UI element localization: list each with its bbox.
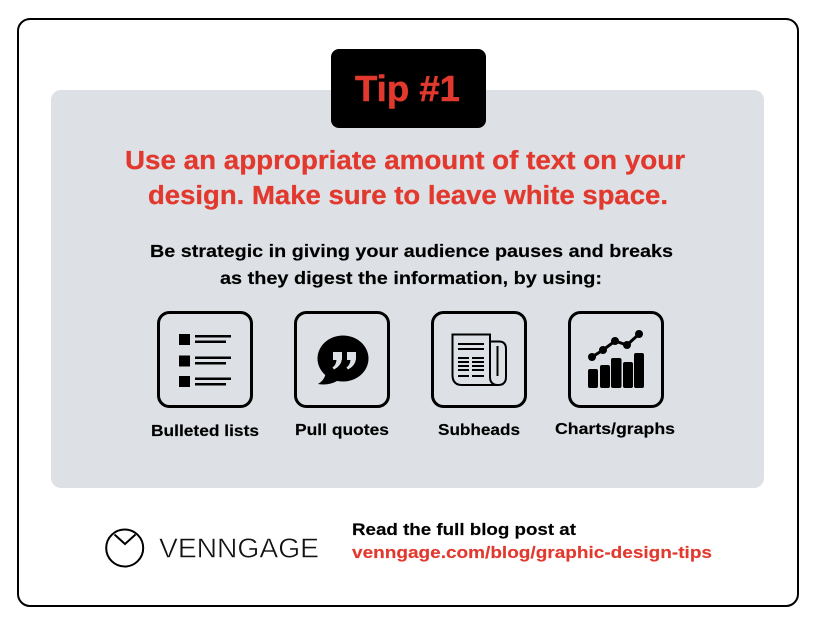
main heading: Use an appropriate amount of text on your	[125, 147, 685, 175]
icon: pull quote	[296, 312, 388, 406]
body text: Be strategic in giving your audience pauses and breaks	[150, 241, 673, 261]
blog link text: venngage.com/blog/graphic-design-tips	[352, 544, 712, 562]
icon labels	[151, 421, 675, 440]
venngage logo: VENNGAGE	[159, 532, 319, 564]
icon: chart	[570, 312, 662, 406]
tip badge: Tip #1	[355, 68, 460, 109]
tip badge	[331, 49, 486, 128]
blog link text	[352, 521, 712, 562]
venngage logo	[106, 530, 319, 566]
icon labels: Pull quotes	[295, 422, 389, 439]
main heading	[125, 147, 685, 210]
icon labels: Subheads	[438, 422, 520, 439]
icon: newspaper	[432, 312, 526, 406]
blog link text: Read the full blog post at	[352, 521, 577, 539]
body text	[150, 241, 673, 288]
grey content panel	[51, 90, 764, 488]
icon labels: Bulleted lists	[151, 423, 259, 440]
icon labels: Charts/graphs	[555, 421, 675, 438]
main heading: design. Make sure to leave white space.	[148, 182, 668, 210]
icon: bulleted list	[158, 312, 252, 406]
body text: as they digest the information, by using:	[220, 268, 602, 288]
